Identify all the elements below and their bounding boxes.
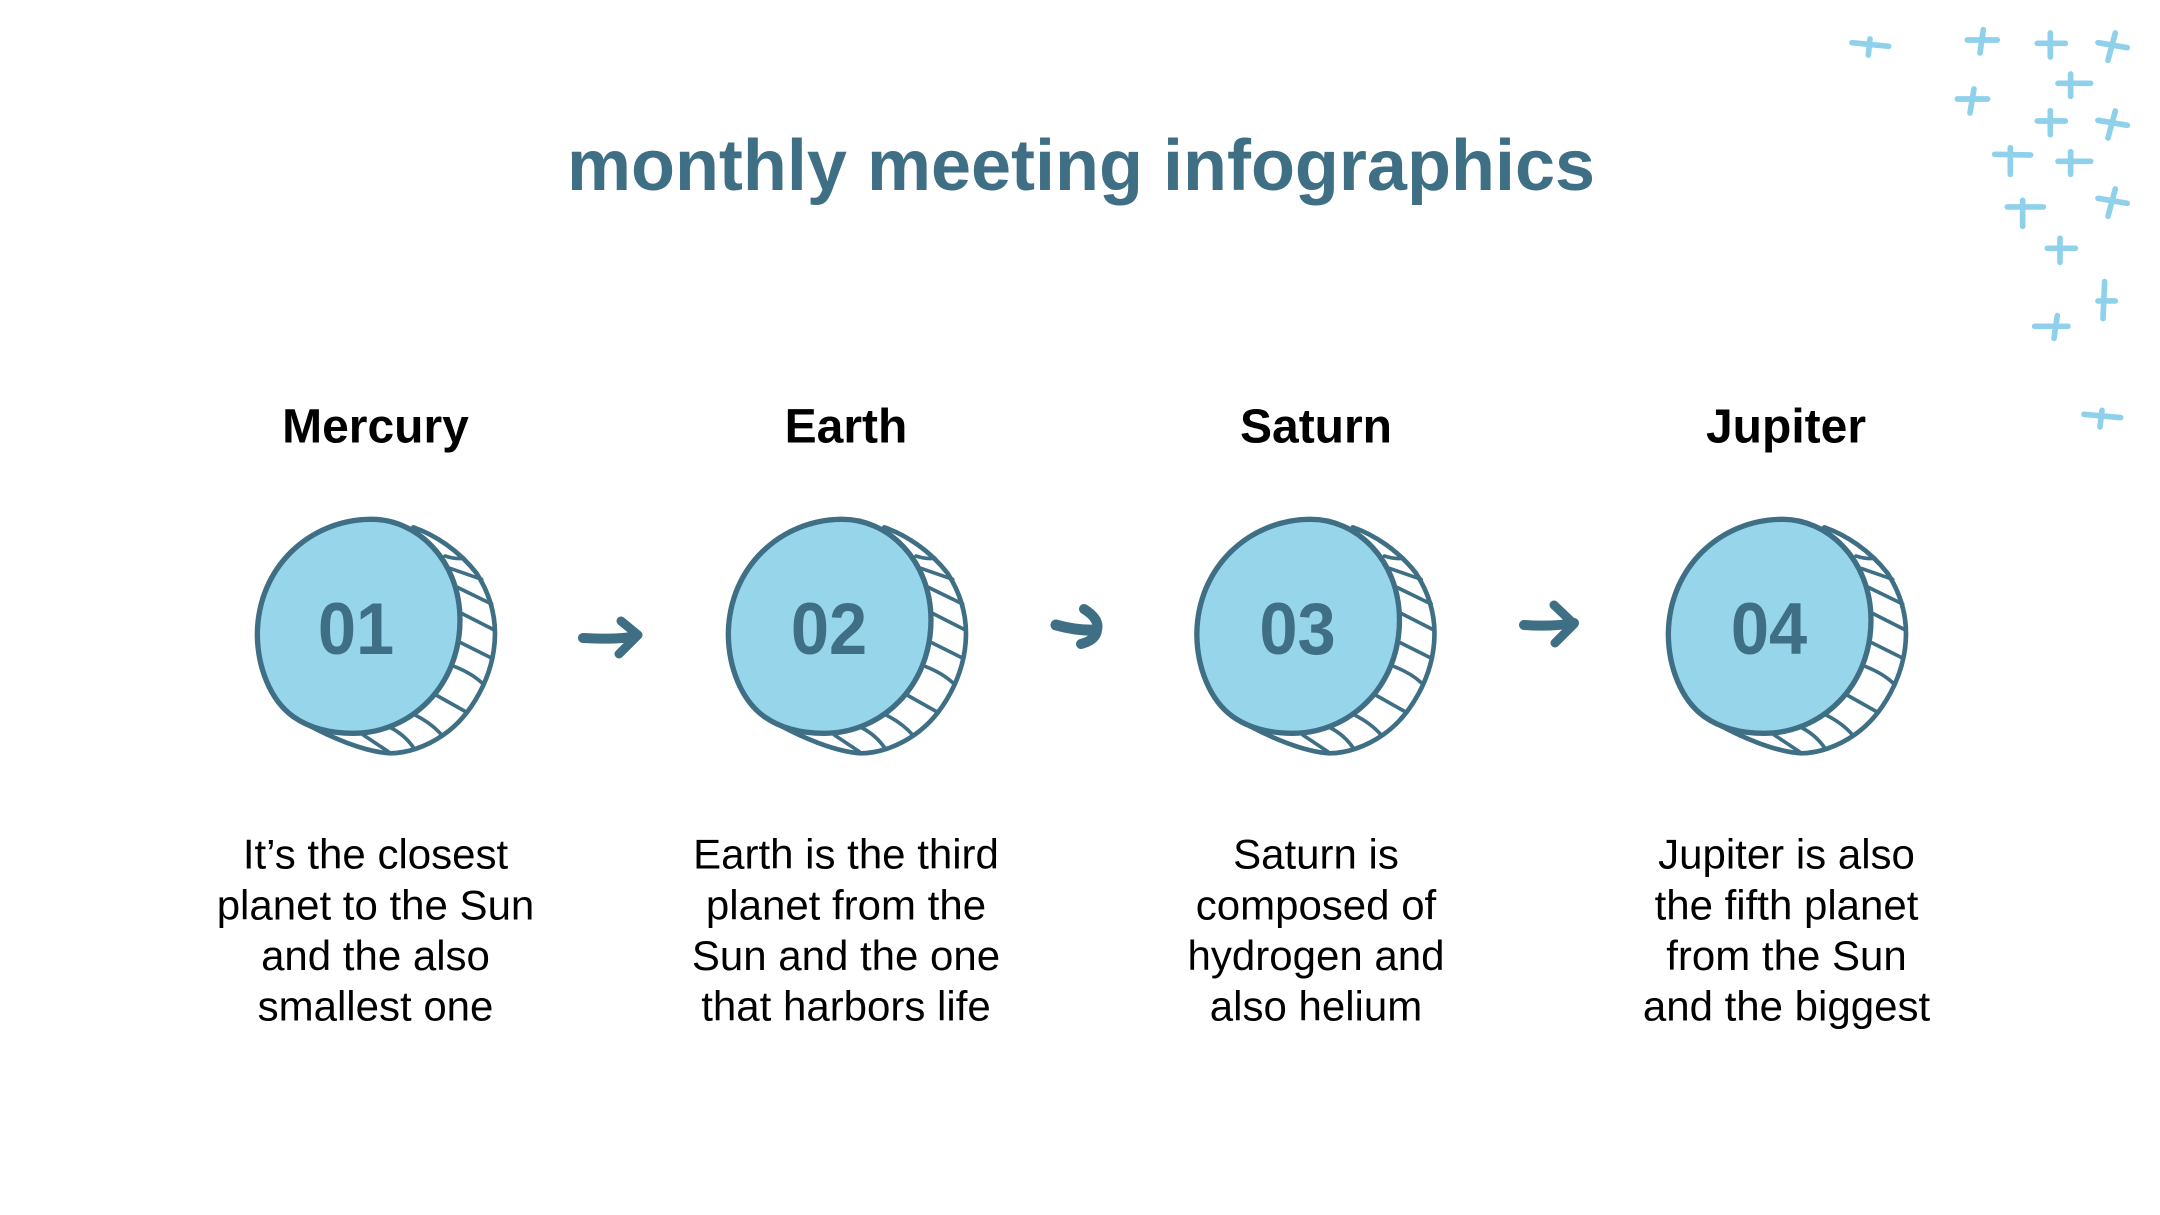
text: Mercury description: smallest one	[258, 982, 493, 1030]
panel: Mercury	[217, 400, 534, 1030]
text: Jupiter description: Jupiter is also	[1658, 830, 1915, 878]
text: Mercury description: planet to the Sun	[217, 882, 534, 928]
arrow 2	[1056, 609, 1097, 644]
text: Jupiter description: the fifth planet	[1655, 882, 1919, 928]
text: Earth description: Sun and the one	[692, 932, 1000, 979]
icon: coin 04	[1668, 519, 1906, 753]
heading: Mercury: Mercury	[282, 400, 469, 454]
arrow 1	[583, 621, 638, 654]
heading: Jupiter: Jupiter	[1706, 400, 1866, 454]
panel: Saturn	[1188, 400, 1444, 1030]
text: Earth description: Earth is the third	[693, 830, 999, 878]
panel: Earth	[692, 400, 1000, 1030]
text: Mercury description: and the also	[261, 932, 490, 979]
text: Saturn description: Saturn is	[1233, 830, 1399, 878]
icon: coin 03	[1197, 519, 1434, 753]
panel: Jupiter	[1643, 400, 1930, 1030]
text: Jupiter description: from the Sun	[1666, 932, 1907, 979]
icon: coin 02: 02	[791, 589, 867, 670]
icon: coin 01: 01	[318, 589, 394, 670]
title: monthly meeting infographics	[567, 126, 1595, 206]
text: Earth description: that harbors life	[701, 982, 991, 1030]
text: Earth description: planet from the	[706, 882, 986, 928]
icon: coin 01	[257, 519, 495, 753]
heading: Earth: Earth	[785, 400, 907, 454]
decorative crosses	[1852, 30, 2127, 427]
heading: Saturn: Saturn	[1240, 400, 1392, 454]
text: Mercury description: It’s the closest	[243, 830, 509, 878]
icon: coin 02	[728, 519, 966, 753]
text: Saturn description: also helium	[1210, 982, 1422, 1030]
text: Saturn description: composed of	[1196, 882, 1437, 928]
text: Saturn description: hydrogen and	[1188, 932, 1444, 979]
text: Jupiter description: and the biggest	[1643, 982, 1930, 1030]
icon: coin 03: 03	[1259, 589, 1336, 670]
arrow 3	[1524, 605, 1574, 643]
icon: coin 04: 04	[1731, 589, 1808, 670]
